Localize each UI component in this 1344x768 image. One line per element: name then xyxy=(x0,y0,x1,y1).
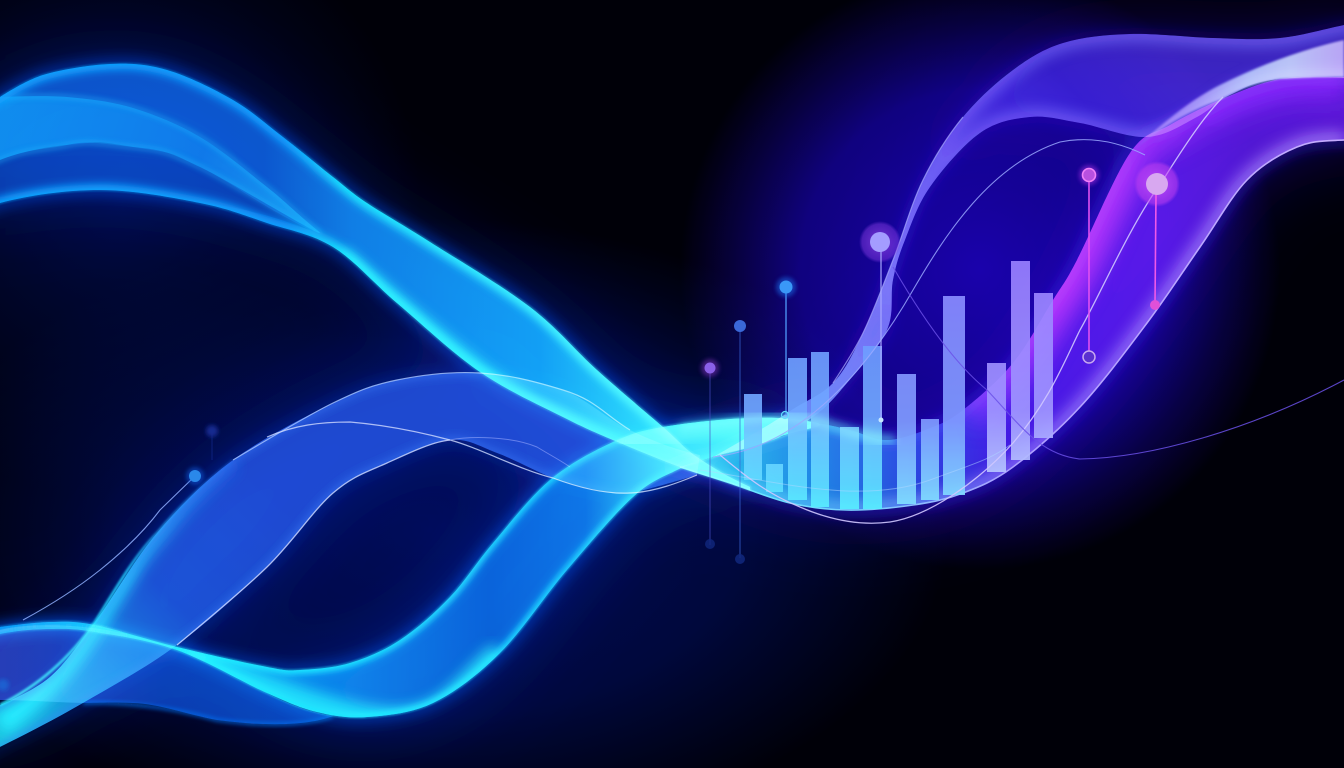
bar chart xyxy=(744,261,1053,509)
data pin: bright blue xyxy=(776,277,796,418)
data pin: large lavender with halo xyxy=(859,221,901,422)
ribbon: main right body, blue to violet xyxy=(680,40,1344,510)
thin trend lines xyxy=(23,97,1344,620)
ribbon: upper-right lavender veil xyxy=(713,20,1344,457)
cyan crossing highlight over the bars xyxy=(680,417,895,440)
data pin: magenta ring xyxy=(1079,165,1099,363)
data pins: faint left nodes xyxy=(0,425,218,691)
data pin: violet left xyxy=(701,359,719,549)
ribbon: top-left sweep flowing into central band xyxy=(0,64,750,490)
ribbon: lower-left dim band xyxy=(0,625,333,724)
ribbon: middle blue veil xyxy=(0,373,700,765)
data pin: large magenta with halo xyxy=(1134,161,1180,310)
ribbon: lower cyan wave rising to centre xyxy=(0,418,820,720)
data pin: dim blue xyxy=(734,320,746,564)
